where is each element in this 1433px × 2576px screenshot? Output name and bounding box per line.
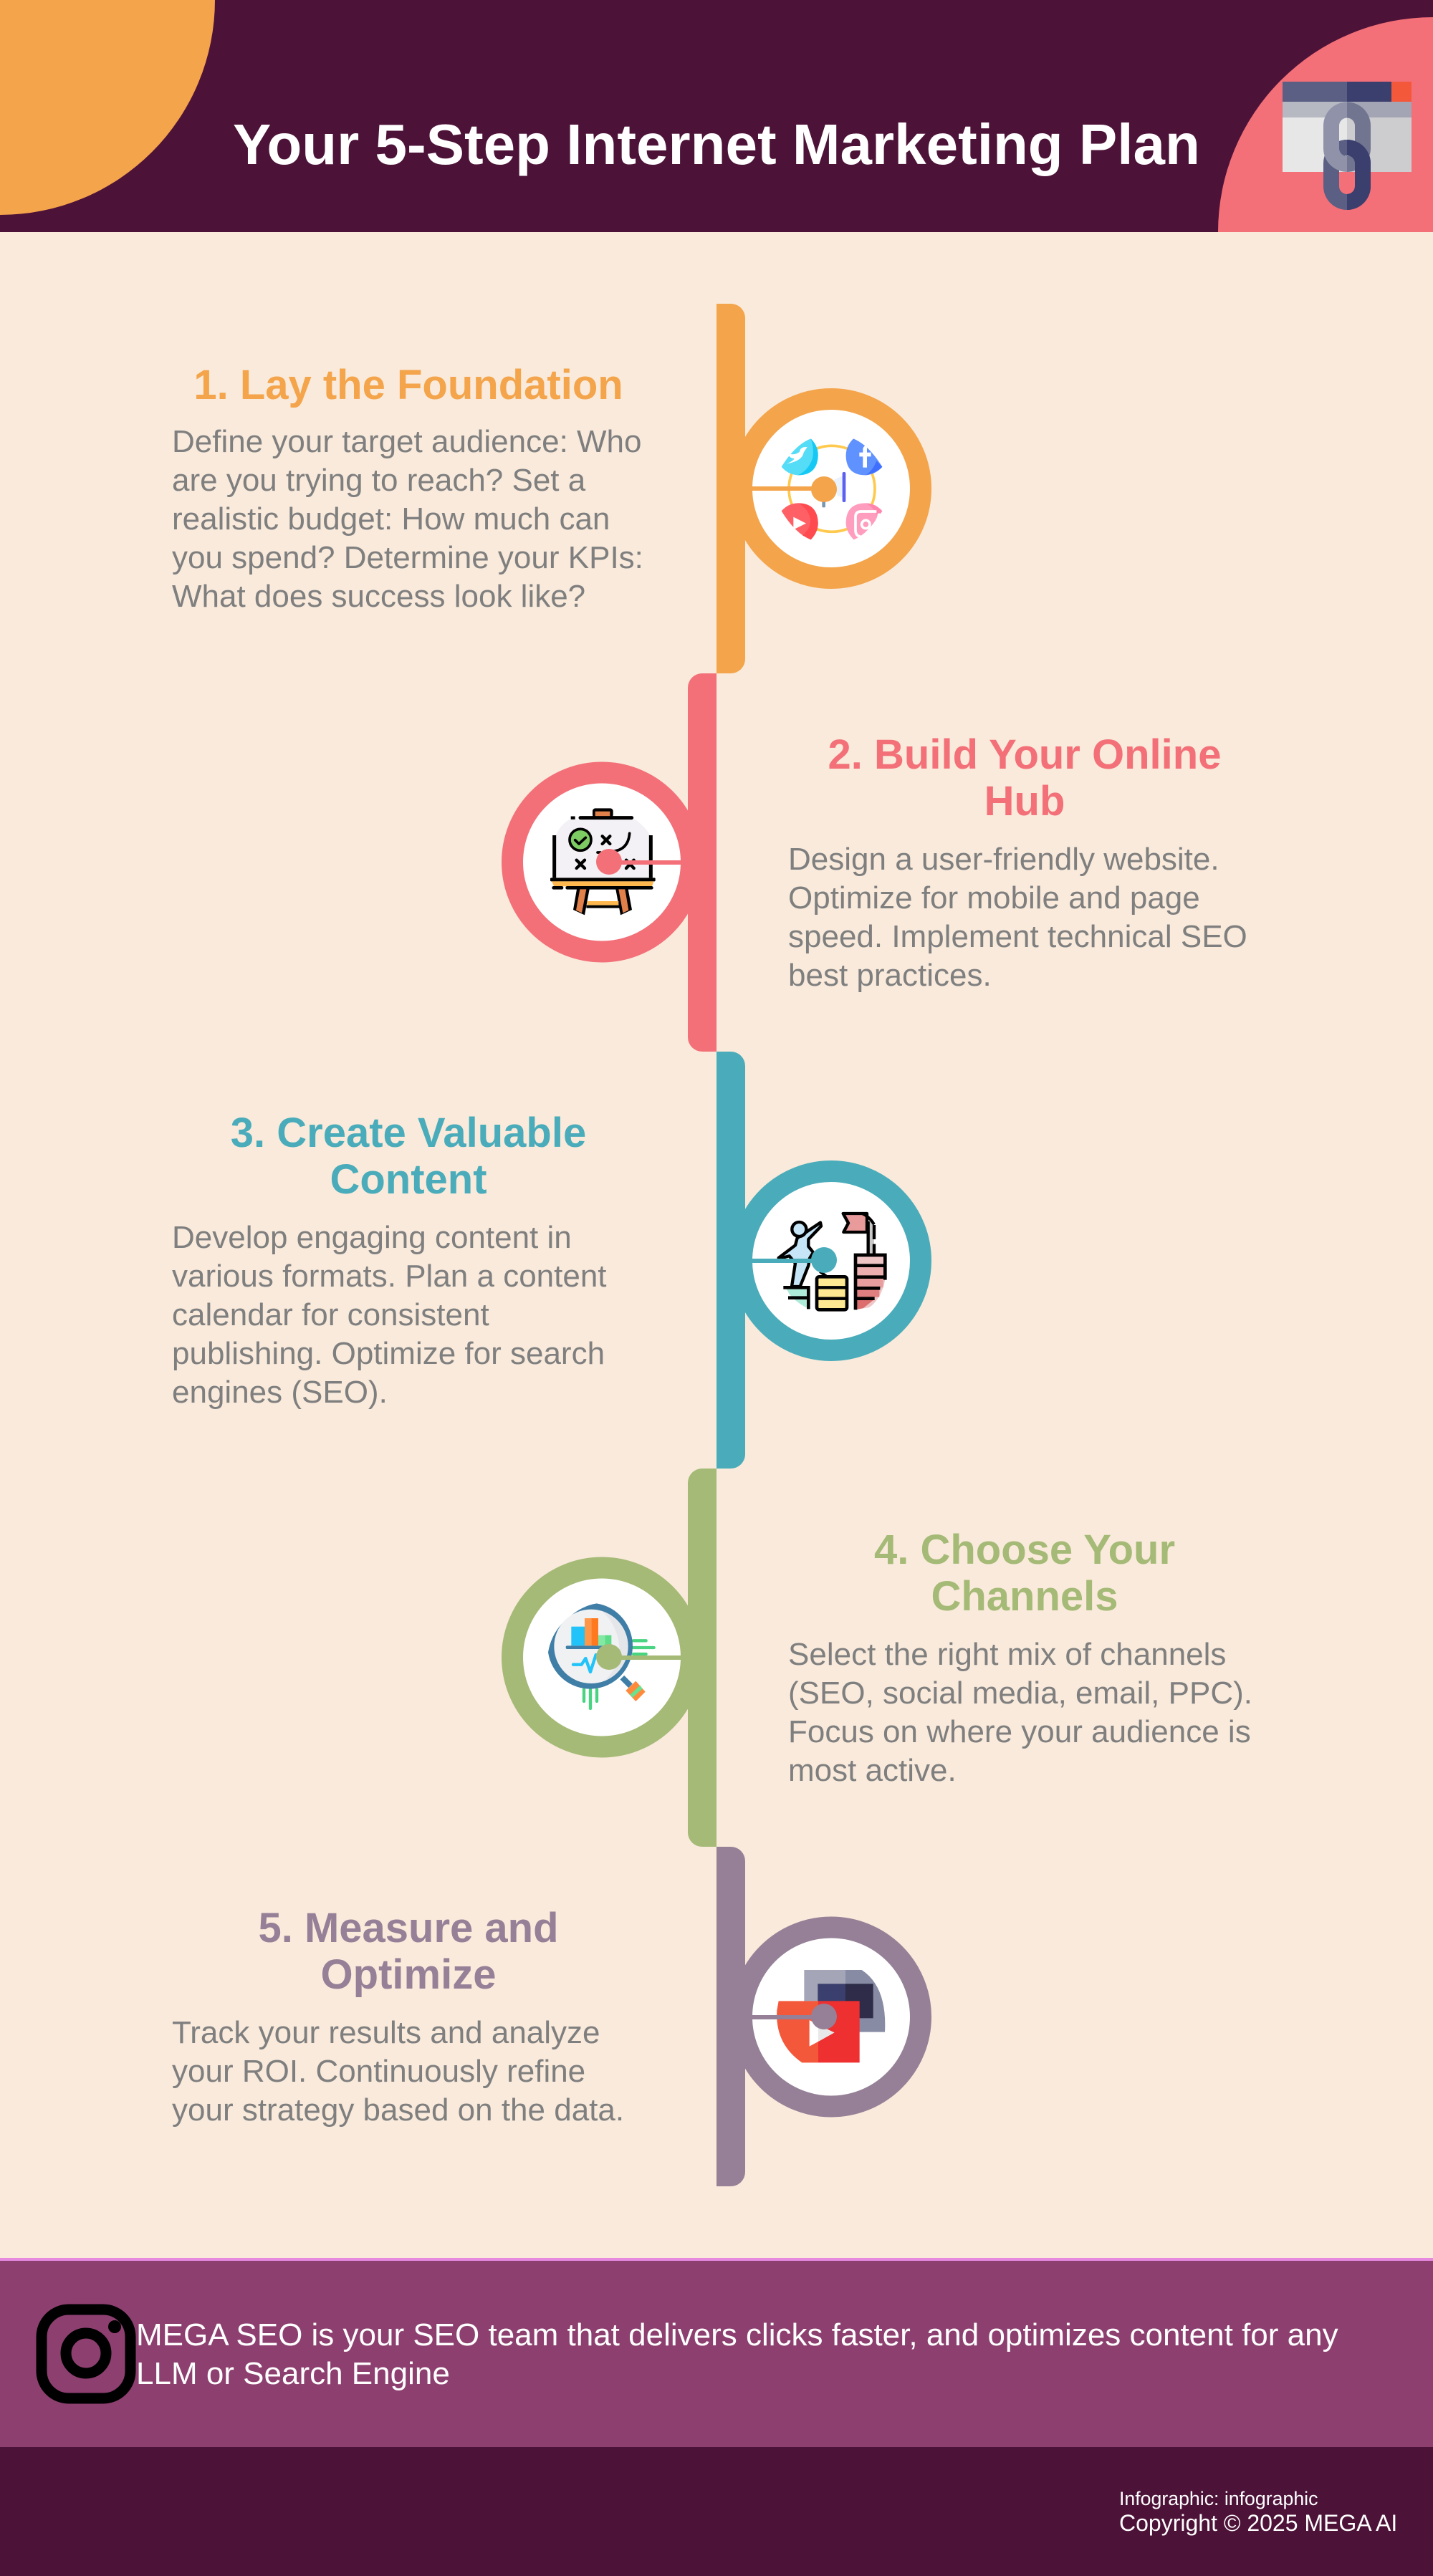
timeline bar 1 [716,304,745,673]
text: step 4: Focus on where your audience is [788,1714,1251,1749]
text: step 5: Track your results and analyze [172,2015,600,2050]
callout text: LLM or Search Engine [136,2356,450,2391]
callout text [136,2317,1338,2391]
text: step 2 [788,842,1247,993]
footer copyright: Copyright © 2025 MEGA AI [1119,2510,1397,2536]
icon: magnifier with chart [548,1603,654,1708]
step 4 ring [512,1567,691,1746]
step 5 connector [752,2004,837,2029]
text: step 5: your strategy based on the data. [172,2092,624,2128]
step 1 text [172,362,643,614]
step 3 ring [742,1171,921,1350]
text: step 4: Select the right mix of channels [788,1637,1226,1672]
heading: step 4: Channels [931,1573,1118,1620]
text: step 3: calendar for consistent [172,1297,489,1332]
text: step 1: What does success look like? [172,579,585,614]
heading: step 5 [258,1905,559,1998]
heading: step 5: Optimize [321,1951,496,1998]
header orange circle [0,0,215,215]
heading: step 3 [231,1110,586,1203]
step 2 connector [596,849,681,875]
title: Your 5-Step Internet Marketing Plan [233,112,1200,176]
heading: step 4 [874,1527,1175,1620]
heading: step 1: 1. Lay the Foundation [193,362,623,408]
heading: step 4: 4. Choose Your [874,1527,1175,1573]
step 2 text [788,731,1247,993]
text: step 1: realistic budget: How much can [172,501,610,537]
icon: social media ring [782,438,882,539]
text: step 1: Define your target audience: Who [172,424,642,459]
step 5 ring [742,1927,921,2106]
step 3 text [172,1110,607,1410]
timeline bar 3 [716,1052,745,1469]
text: step 4: most active. [788,1753,957,1788]
footer band [0,2447,1433,2576]
icon: climbing steps to flag [779,1213,885,1309]
step 4 connector [596,1644,681,1670]
icon: video content squares [777,1970,885,2062]
text: step 3: publishing. Optimize for search [172,1336,605,1371]
icon: browser with chain link [1283,82,1412,210]
icon: instagram [36,2304,136,2404]
text: step 4: (SEO, social media, email, PPC). [788,1676,1252,1711]
text: step 4 [788,1637,1252,1788]
text: step 1: you spend? Determine your KPIs: [172,540,643,575]
call-to-action band [0,2258,1433,2447]
step 5 text [172,1905,624,2128]
footer credit: Infographic: infographic [1119,2488,1318,2509]
step 2 ring [512,772,691,951]
header band [0,0,1433,232]
text: step 3: Develop engaging content in [172,1220,572,1255]
heading: step 2: Hub [984,778,1065,825]
header pink circle [1218,17,1433,232]
text: step 2: best practices. [788,958,992,993]
text: step 2: Optimize for mobile and page [788,880,1200,915]
callout text: MEGA SEO is your SEO team that delivers clicks faster, and optimizes content for any [136,2317,1338,2352]
text: step 5: your ROI. Continuously refine [172,2054,585,2089]
timeline bar 5 [716,1847,745,2186]
heading: step 5: 5. Measure and [258,1905,559,1951]
timeline bar 4 [688,1469,716,1847]
text: step 1 [172,424,643,614]
timeline bar 2 [688,673,716,1052]
step 3 connector [752,1247,837,1273]
text: step 3: various formats. Plan a content [172,1259,607,1294]
heading: step 2 [828,731,1221,825]
text: step 1: are you trying to reach? Set a [172,463,585,498]
heading: step 3: Content [330,1156,487,1203]
step 4 text [788,1527,1252,1788]
text: step 2: Design a user-friendly website. [788,842,1219,877]
heading: step 3: 3. Create Valuable [231,1110,586,1156]
text: step 5 [172,2015,624,2128]
icon: strategy board on easel [550,808,656,915]
text: step 2: speed. Implement technical SEO [788,919,1247,954]
step 1 connector [752,476,837,502]
heading: step 2: 2. Build Your Online [828,731,1221,778]
text: step 3: engines (SEO). [172,1375,388,1410]
step 1 ring [742,399,921,578]
text: step 3 [172,1220,607,1410]
